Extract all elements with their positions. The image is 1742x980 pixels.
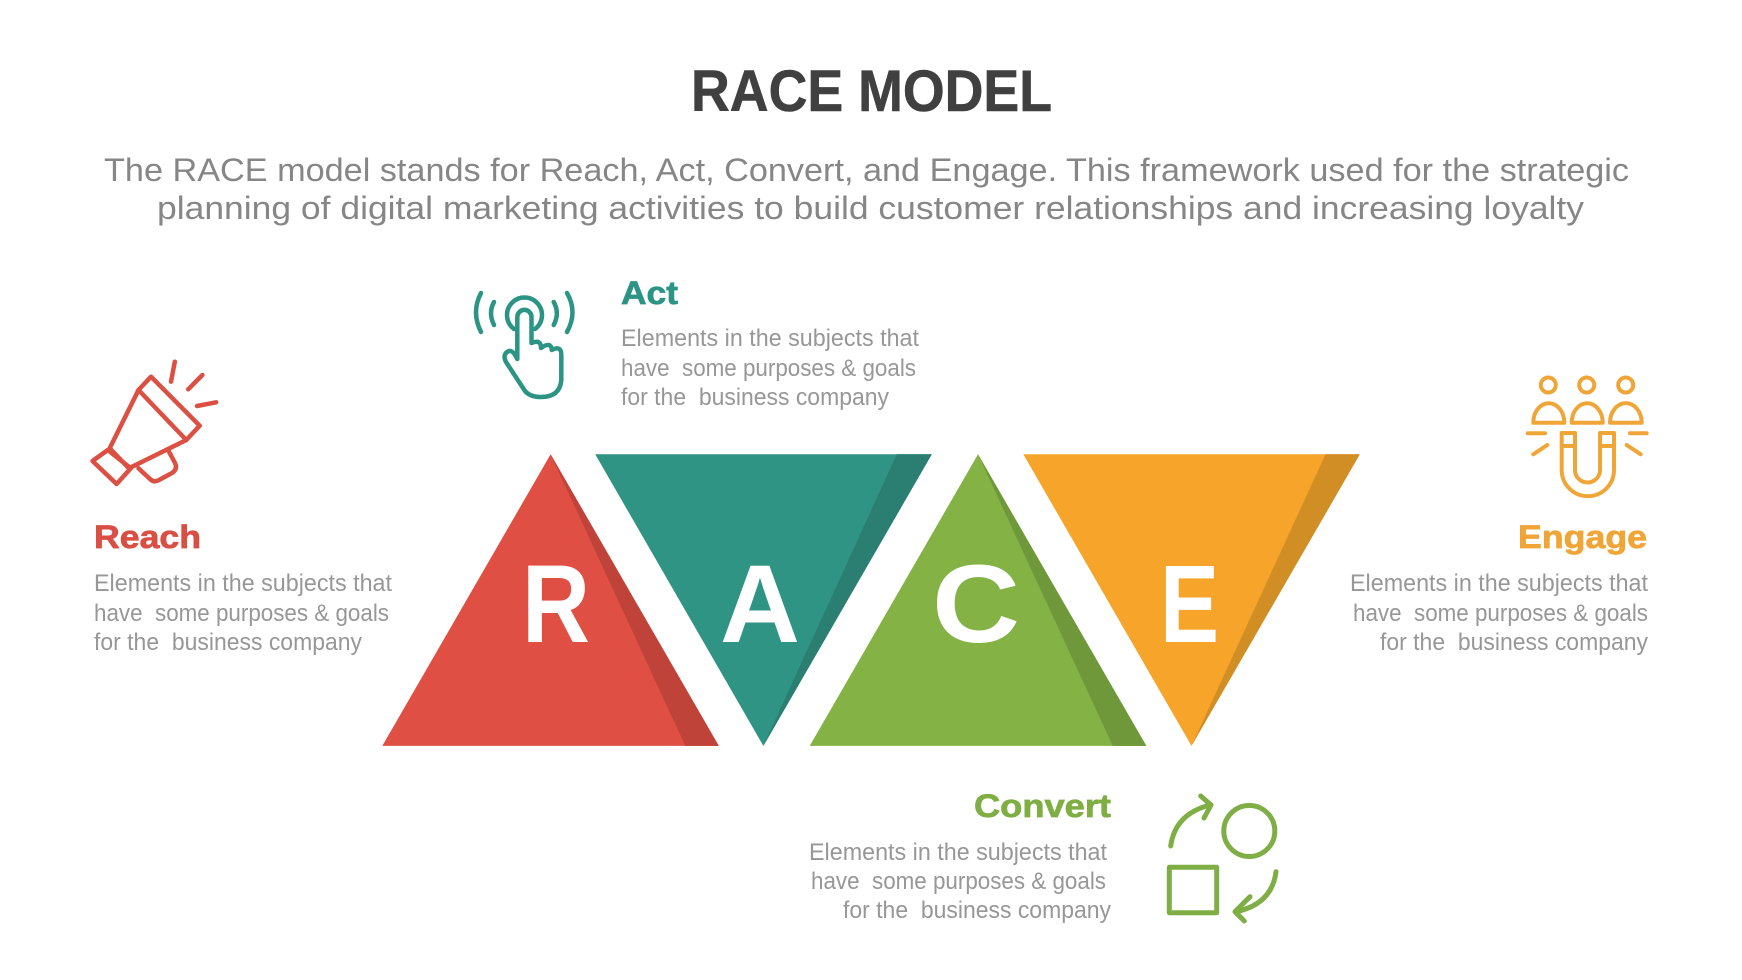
text: Reach description: for the business company bbox=[94, 629, 363, 656]
subtitle text block bbox=[104, 152, 1629, 226]
text: Convert description bbox=[809, 839, 1112, 924]
icon: megaphone bbox=[92, 362, 216, 484]
text: Convert description: have some purposes & goals bbox=[811, 868, 1106, 895]
icon: people and magnet bbox=[1528, 378, 1647, 496]
icon: shapes conversion bbox=[1169, 796, 1276, 921]
text: Engage description bbox=[1350, 570, 1649, 656]
triangle E bbox=[1023, 454, 1360, 746]
heading: Convert: Convert bbox=[974, 788, 1111, 824]
text: Convert description: for the business company bbox=[843, 897, 1112, 924]
text: Engage description: Elements in the subjects that bbox=[1350, 570, 1648, 597]
title: RACE MODEL bbox=[691, 59, 1052, 124]
panel: engage bbox=[1350, 378, 1649, 656]
text: Act description: have some purposes & goals bbox=[621, 355, 916, 382]
triangle E: E bbox=[1160, 543, 1219, 666]
heading: Engage: Engage bbox=[1518, 519, 1647, 555]
triangle R bbox=[382, 454, 719, 746]
panel: convert bbox=[809, 788, 1276, 924]
triangle A bbox=[595, 454, 932, 746]
text: Engage description: for the business company bbox=[1380, 629, 1649, 656]
triangle diagram: RACE bbox=[382, 454, 1360, 746]
text: Act description bbox=[621, 325, 919, 411]
panel: reach bbox=[92, 362, 392, 656]
subtitle text block: The RACE model stands for Reach, Act, Convert, and Engage. This framework used for the strategic bbox=[104, 152, 1629, 188]
text: Act description: Elements in the subjects that bbox=[621, 325, 919, 352]
text: Engage description: have some purposes & goals bbox=[1353, 600, 1648, 627]
icon: tapping hand bbox=[476, 293, 572, 397]
triangle R: R bbox=[522, 543, 590, 666]
subtitle text block: planning of digital marketing activities to build customer relationships and increasing loyalty bbox=[157, 190, 1585, 226]
text: Reach description bbox=[94, 570, 392, 656]
triangle C bbox=[810, 454, 1146, 746]
triangle A: A bbox=[720, 543, 800, 666]
text: Act description: for the business company bbox=[621, 384, 890, 411]
heading: Reach: Reach bbox=[94, 519, 201, 555]
heading: Act: Act bbox=[621, 275, 678, 311]
text: Reach description: Elements in the subjects that bbox=[94, 570, 392, 597]
panel: act bbox=[476, 275, 919, 411]
triangle C: C bbox=[932, 543, 1020, 666]
text: Reach description: have some purposes & goals bbox=[94, 600, 389, 627]
text: Convert description: Elements in the subjects that bbox=[809, 839, 1107, 866]
